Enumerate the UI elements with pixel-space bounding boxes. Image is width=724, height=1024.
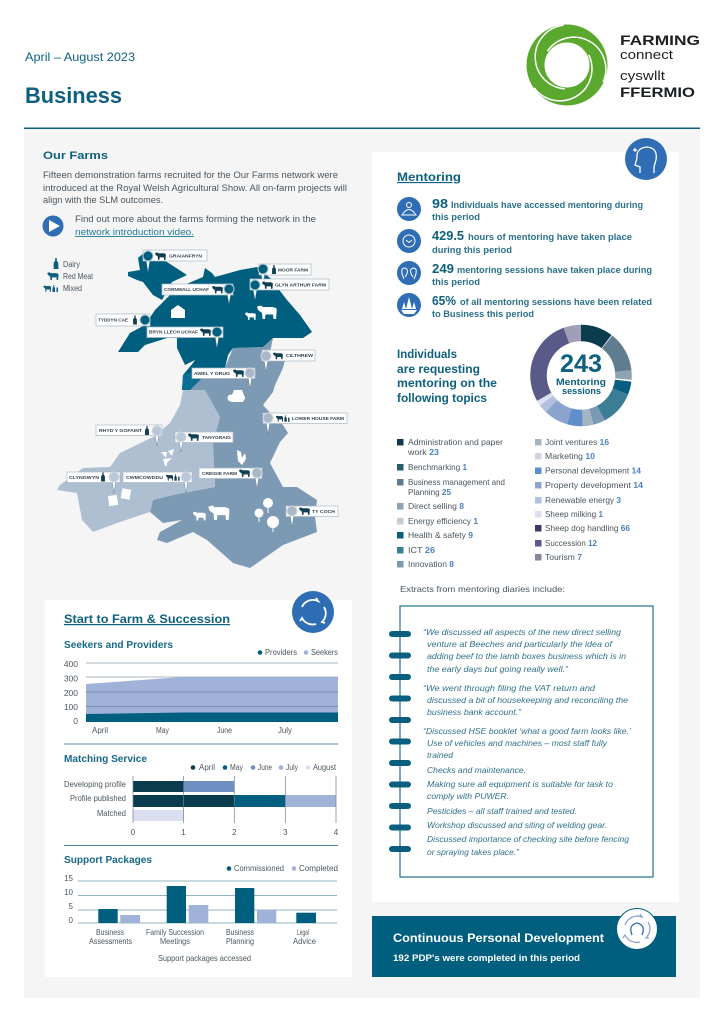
farm pin: Glyn Arthur Farm: GLYN ARTHUR FARM [275,282,326,288]
panel: Continuous Personal Development: 192 PDP's were completed in this period [393,953,580,963]
donut legend: right column: Personal development 14 [545,466,641,476]
donut legend: right column: Sheep dog handling 66 [545,523,630,533]
heading: Our Farms: Our Farms [43,150,108,162]
stat: hours: hours of mentoring have taken place [468,232,632,242]
quote 1: adding beef to the lamb boxes business which is in [427,651,626,661]
intro paragraph [43,170,347,205]
donut legend: left column: Direct selling 8 [408,501,464,511]
logo: Farming Connect: FARMING [620,33,700,48]
stat: percent related to business: 65% [432,293,456,308]
stat: individuals: Individuals have accessed mentoring during [451,200,643,210]
subheading: topics: Individuals [397,349,457,361]
stat: sessions: this period [432,277,480,287]
donut legend: right column: Property development 14 [545,480,643,490]
intro paragraph: Fifteen demonstration farms recruited for the Our Farms network were [43,170,338,180]
bar chart: support packages: Family Succession [146,928,204,937]
bar chart legend: support packages: Completed [299,864,338,873]
panel: Our Farms [42,150,347,568]
quote 3: Pesticides – all staff trained and tested. [427,806,577,816]
farm pin: Cilthrew [261,350,315,372]
quote 2: discussed a bit of housekeeping and reconciling the [427,695,628,705]
area chart: seekers and providers: 0 [73,716,78,726]
area chart legend: Providers [265,648,297,657]
donut legend: left column: Health & safety 9 [408,530,473,540]
bar chart: matching service [64,776,339,837]
stat: sessions [397,261,652,287]
donut legend: left column [397,437,505,569]
bar chart: support packages: Assessments [89,937,132,946]
video link text: Find out more about the farms forming the network in the [75,214,316,224]
subheading: topics: mentoring on the [397,378,497,390]
area chart: seekers and providers: 400 [64,659,78,669]
date line: April – August 2023 [25,50,135,64]
donut legend: left column: Administration and paper [408,437,503,447]
bar chart legend: months: June [258,763,272,772]
donut legend: left column: Business management and [408,477,505,487]
bar chart: support packages: Business [226,928,254,937]
farm pin: Tyddyn Cae [96,314,150,326]
farm pin: Rhyd y Gofaint [96,425,162,446]
farm pin: Ty Coch [286,506,338,527]
farm pin: Tyddyn Cae: TYDDYN CAE [98,318,129,324]
bar chart: support packages: Meetings [160,937,190,946]
text: extracts intro: Extracts from mentoring diaries include: [400,584,565,594]
bar chart: matching service: 3 [283,828,288,837]
stat: individuals: this period [432,212,480,222]
bar chart legend: months [191,763,337,772]
stat: sessions: 249 [432,261,454,276]
donut chart: mentoring sessions: sessions [562,386,601,397]
bar chart: matching service: 1 [181,828,186,837]
intro paragraph: align with the SLM outcomes. [43,195,163,205]
map legend: Red Meat [63,272,94,281]
donut legend: left column: Planning 25 [408,487,451,497]
area chart legend [258,648,338,657]
heading: Seekers and Providers: Seekers and Providers [64,640,173,651]
stat: hours: 429.5 [432,228,464,243]
farm pin: Clyngwyn [67,472,120,493]
quote 2: business bank account.” [427,707,522,717]
stat: percent related to business: of all mentoring sessions have been related [460,297,652,307]
icon: play button [42,216,64,236]
area chart: seekers and providers: July [278,726,292,735]
quote 3: trained [427,750,453,760]
area chart: seekers and providers: 200 [64,688,78,698]
notebook: diary extracts [392,606,653,877]
area chart: seekers and providers: 300 [64,674,78,684]
donut legend: right column: Tourism 7 [545,552,582,562]
heading: Mentoring: Mentoring [397,172,461,184]
bar chart legend: months: May [230,763,243,772]
farm pin: Creigie Farm [199,468,262,489]
video link text: network introduction video. [75,227,194,237]
donut chart: mentoring sessions: Mentoring [556,377,606,388]
area chart: seekers and providers: June [217,726,232,735]
donut legend: right column: Renewable energy 3 [545,495,621,505]
panel: Start to Farm & Succession [45,591,352,977]
logo: Farming Connect: FFERMIO [620,85,695,100]
logo: Farming Connect: connect [620,47,673,62]
quote 3: Making sure all equipment is suitable for task to [427,779,613,789]
farm pin: Cilthrew: CILTHREW [286,353,313,359]
icon: cycle arrows [292,591,334,633]
bar chart: matching service: Developing profile [64,780,127,789]
bar chart: matching service: Profile published [70,794,126,803]
area chart: seekers and providers: May [156,726,169,735]
bar chart legend: support packages: Commissioned [234,864,284,873]
bar chart: support packages: Business [96,928,124,937]
quote 3 [423,726,631,857]
intro paragraph: introduced at the Royal Welsh Agricultural Show. All on-farm projects will [43,183,347,193]
farm pin: Cwmcowddu [123,472,192,493]
bar chart: matching service: 2 [232,828,237,837]
farm pin: Glyn Arthur Farm [250,279,329,300]
map legend [44,258,94,293]
donut legend: left column: Energy efficiency 1 [408,516,478,526]
farm pin: Lower House Farm: LOWER HOUSE FARM [292,416,344,422]
stat: hours: during this period [432,245,512,255]
panel: Continuous Personal Development [372,908,676,977]
quote 3: “Discussed HSE booklet ‘what a good farm looks like.’ [423,726,631,736]
donut legend: left column: Benchmarking 1 [408,462,467,472]
stat: hours [397,228,632,255]
heading: Start to Farm & Succession: Start to Farm & Succession [64,612,230,626]
donut legend: right column: Sheep milking 1 [545,509,603,519]
farm pin: Awel y Grug: AWEL Y GRUG [194,371,230,377]
area chart: seekers and providers: 100 [64,702,78,712]
quote 1: venture at Beeches and particularly the idea of [427,639,614,649]
map of Wales regions [57,252,317,568]
bar chart legend: months: April [199,763,215,772]
donut legend: right column: Joint ventures 16 [545,437,609,447]
subheading: topics [397,349,497,405]
donut legend: left column: ICT 26 [408,545,435,555]
panel: Mentoring [372,138,679,902]
farm pin: Tanygraig: TANYGRAIG [202,435,231,441]
farm pin: Cornwall Uchaf [162,284,234,304]
farm pin: Creigie Farm: CREIGIE FARM [202,471,237,477]
bar chart: support packages: 5 [69,902,74,911]
bar chart: support packages: Support packages accessed [158,954,251,963]
farm pin: Tanygraig [175,432,233,452]
area chart legend: Seekers [311,648,338,657]
stat: percent related to business [397,293,652,319]
donut legend: right column: Succession 12 [545,538,597,548]
area chart: seekers and providers: April [92,726,108,735]
quote 2: “We went through filing the VAT return and [423,683,595,693]
quote 3: Checks and maintenance. [427,765,526,775]
bar chart: support packages [64,874,337,963]
stat: sessions: mentoring sessions have taken place during [457,265,652,275]
quote 3: Workshop discussed and siting of welding gear. [427,820,607,830]
bar chart: matching service: 4 [334,828,339,837]
farm pin: Lower House Farm [263,413,347,434]
quote 2 [423,683,628,717]
farm pin: Rhyd y Gofaint: RHYD Y GOFAINT [99,428,142,434]
farm pin: Graianfryn [143,250,207,272]
donut chart: mentoring sessions: 243 [560,350,602,378]
heading: Matching Service: Matching Service [64,754,147,765]
bar chart: matching service: Matched [97,809,126,818]
farm pin: Cornwall Uchaf: CORNWALL UCHAF [164,287,209,293]
icon: head [625,138,667,180]
farm pin: Graianfryn: GRAIANFRYN [169,254,203,260]
donut legend: left column: work 23 [407,447,439,457]
stat: individuals: 98 [432,196,448,211]
farm pin: Awel y Grug [192,368,255,389]
donut chart: mentoring sessions [538,333,624,418]
map legend: Mixed [63,284,82,293]
bar chart: support packages: 10 [64,888,74,897]
bar chart: support packages: 0 [69,916,74,925]
farm pin: Bryn Llech Uchaf [147,327,223,348]
quote 3: Use of vehicles and machines – most staff fully [427,738,608,748]
donut legend: left column: Innovation 8 [408,559,454,569]
farm pin: Moor Farm: MOOR FARM [278,268,308,274]
map legend: Dairy [63,260,80,269]
quote 3: or spraying takes place.” [427,847,520,857]
quote 1: the early days but going really well.” [427,664,569,674]
quote 1: “We discussed all aspects of the new direct selling [423,627,621,637]
area chart: seekers and providers [64,659,338,735]
farm pin: Ty Coch: TY COCH [312,509,336,515]
video link text [75,214,316,237]
bar chart: matching service: 0 [131,828,136,837]
icon: cycle with head [616,908,658,950]
stat: individuals [397,196,643,222]
subheading: topics: following topics [397,393,487,405]
logo: Farming Connect: cyswllt [620,68,665,83]
bar chart: support packages: Planning [226,937,254,946]
bar chart: support packages: 15 [64,874,74,883]
logo: Farming Connect [534,25,700,112]
heading: Support Packages: Support Packages [64,855,152,866]
farm pin: Cwmcowddu: CWMCOWDDU [126,475,164,481]
grey page panel [24,129,700,998]
bar chart legend: support packages [227,864,338,873]
quote 3: Discussed importance of checking site before fencing [427,834,629,844]
donut legend: right column: Marketing 10 [545,451,595,461]
farm pin: Moor Farm [258,264,311,285]
quote 1 [423,627,626,674]
panel: Continuous Personal Development: Continuous Personal Development [393,933,604,945]
farm pin: Bryn Llech Uchaf: BRYN LLECH UCHAF [149,330,198,336]
bar chart legend: months: August [313,763,337,772]
subheading: topics: are requesting [397,364,480,376]
stat: percent related to business: to Business this period [432,309,534,319]
bar chart: support packages: Legal [297,928,309,937]
donut legend: right column [535,437,643,562]
bar chart: support packages: Advice [293,937,317,946]
quote 3: comply with PUWER. [427,791,509,801]
farm pin: Clyngwyn: CLYNGWYN [69,475,100,481]
bar chart legend: months: July [286,763,298,772]
page title: Business [25,83,122,108]
